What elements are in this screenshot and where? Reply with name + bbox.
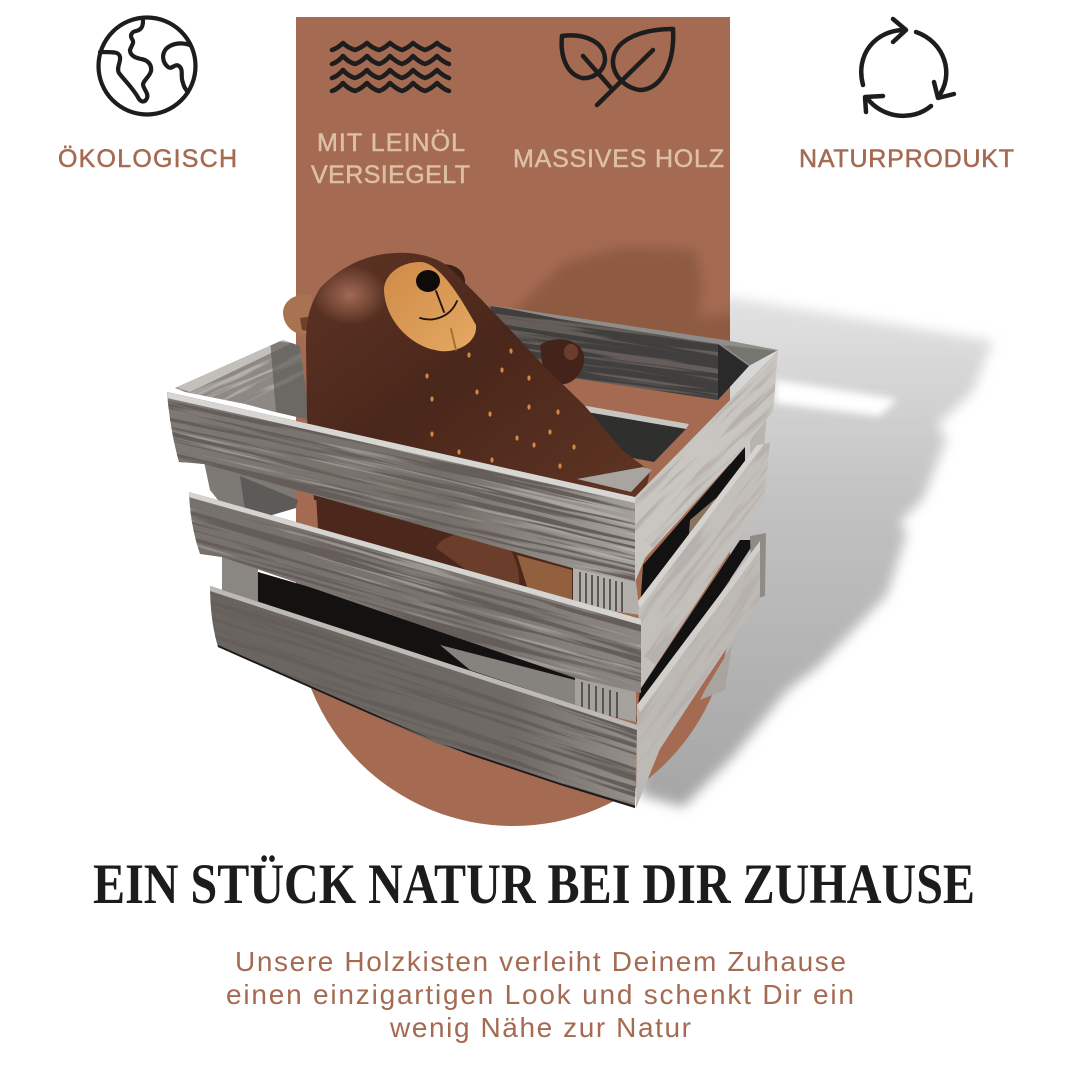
body text: wenig Nähe zur Natur [389, 1012, 691, 1043]
label: massives holz: MASSIVES HOLZ [513, 145, 724, 173]
bear ear right [440, 264, 465, 290]
shadow on panel [514, 245, 730, 341]
plank: front middle [189, 492, 641, 693]
icon: recycling arrows [861, 19, 954, 116]
crate: back and interior [116, 240, 778, 602]
bear lower body [316, 495, 600, 640]
bear ear left [283, 295, 314, 335]
bear leg [517, 555, 572, 610]
plank: front bottom [210, 586, 637, 808]
bear dots [425, 348, 576, 469]
bear head shine [312, 265, 388, 325]
plank: right middle [638, 443, 770, 688]
bear body [306, 253, 650, 520]
crate: posts and gaps [258, 410, 767, 722]
body text: Unsere Holzkisten verleiht Deinem Zuhause [235, 946, 846, 977]
label: ökologisch: ÖKOLOGISCH [58, 145, 237, 173]
cast shadow on white [640, 296, 993, 807]
bear muzzle [384, 262, 476, 351]
bear: plush toy [283, 253, 650, 640]
label: mit leinöl versiegelt: MIT LEINÖL [317, 129, 465, 157]
icon: globe [98, 18, 196, 114]
icon: water waves [332, 43, 449, 91]
bear hand [540, 339, 584, 388]
label: mit leinöl versiegelt: VERSIEGELT [311, 161, 470, 189]
bear mouth [420, 291, 457, 350]
plank: front top [167, 392, 635, 582]
panel: terracotta arch [296, 17, 730, 826]
plank: right bottom [636, 541, 760, 808]
label: mit leinöl versiegelt [311, 129, 470, 189]
plank: right top [635, 351, 778, 582]
bear foot [436, 533, 519, 585]
icon: leaves [562, 29, 673, 105]
bear nose [416, 270, 440, 292]
body text [226, 946, 854, 1043]
body text: einen einzigartigen Look und schenkt Dir ein [226, 979, 854, 1010]
crate: corner top [577, 467, 652, 492]
label: naturprodukt: NATURPRODUKT [799, 145, 1014, 173]
back top plank [490, 306, 724, 400]
